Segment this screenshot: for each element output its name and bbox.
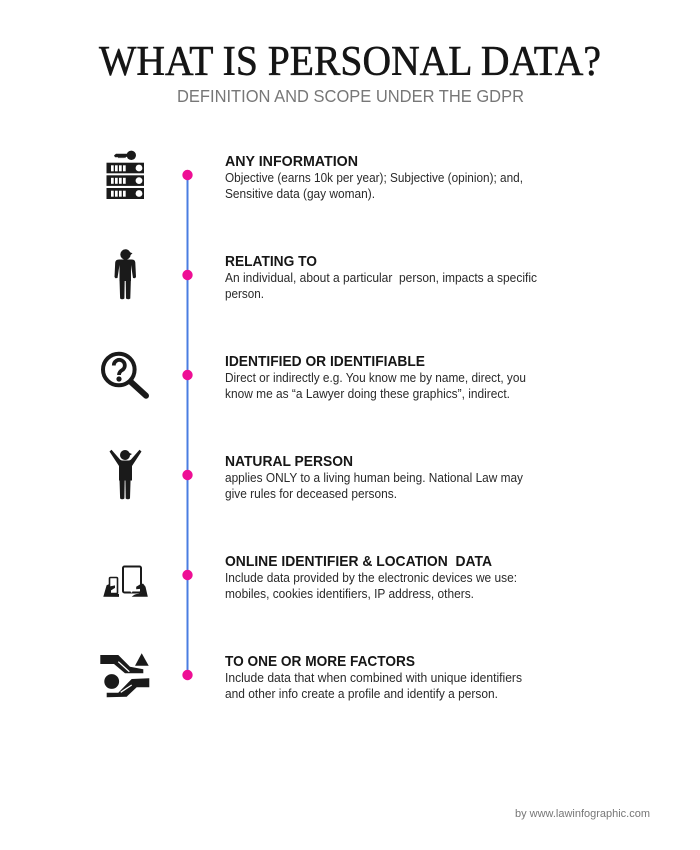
item: relating to bbox=[225, 254, 537, 301]
icon: phone and tablet in hands bbox=[103, 566, 148, 597]
item: any information bbox=[225, 154, 523, 201]
icon: person with raised arms bbox=[110, 450, 142, 499]
item: natural person: NATURAL PERSON bbox=[225, 454, 353, 470]
item: to one or more factors: Include data that when combined with unique identifiers bbox=[225, 671, 522, 685]
icon: person bbox=[114, 249, 136, 299]
title: WHAT IS PERSONAL DATA? bbox=[99, 39, 601, 85]
item: online identifier and location data: Include data provided by the electronic devices we use: bbox=[225, 571, 517, 585]
item: any information: ANY INFORMATION bbox=[225, 154, 358, 170]
item: natural person: give rules for deceased persons. bbox=[225, 487, 397, 501]
item: online identifier and location data: mobiles, cookies identifiers, IP address, others. bbox=[225, 587, 474, 601]
item: relating to: An individual, about a particular person, impacts a specific bbox=[225, 271, 537, 285]
item: online identifier and location data bbox=[225, 554, 517, 601]
item: identified or identifiable: Direct or indirectly e.g. You know me by name, direct, you bbox=[225, 371, 526, 385]
item: natural person bbox=[225, 454, 524, 501]
icon: magnifying glass with question mark bbox=[103, 354, 146, 396]
timeline bbox=[182, 170, 193, 680]
item: identified or identifiable: know me as “a Lawyer doing these graphics”, indirect. bbox=[225, 387, 510, 401]
item: relating to: RELATING TO bbox=[225, 254, 317, 270]
item: natural person: applies ONLY to a living human being. National Law may bbox=[225, 471, 524, 485]
icon: key and servers bbox=[106, 151, 144, 199]
item: identified or identifiable bbox=[225, 354, 526, 401]
subtitle: DEFINITION AND SCOPE UNDER THE GDPR bbox=[177, 86, 524, 106]
item: any information: Sensitive data (gay woman). bbox=[225, 187, 375, 201]
item: to one or more factors: and other info create a profile and identify a person. bbox=[225, 687, 498, 701]
footer credit: by www.lawinfographic.com bbox=[515, 808, 650, 820]
item: online identifier and location data: ONLINE IDENTIFIER & LOCATION DATA bbox=[225, 554, 492, 570]
item: relating to: person. bbox=[225, 287, 264, 301]
item: any information: Objective (earns 10k per year); Subjective (opinion); and, bbox=[225, 171, 523, 185]
item: identified or identifiable: IDENTIFIED OR IDENTIFIABLE bbox=[225, 354, 425, 370]
item: to one or more factors: TO ONE OR MORE FACTORS bbox=[225, 654, 415, 670]
item: to one or more factors bbox=[225, 654, 522, 701]
icon: hands exchanging shapes bbox=[100, 653, 149, 697]
